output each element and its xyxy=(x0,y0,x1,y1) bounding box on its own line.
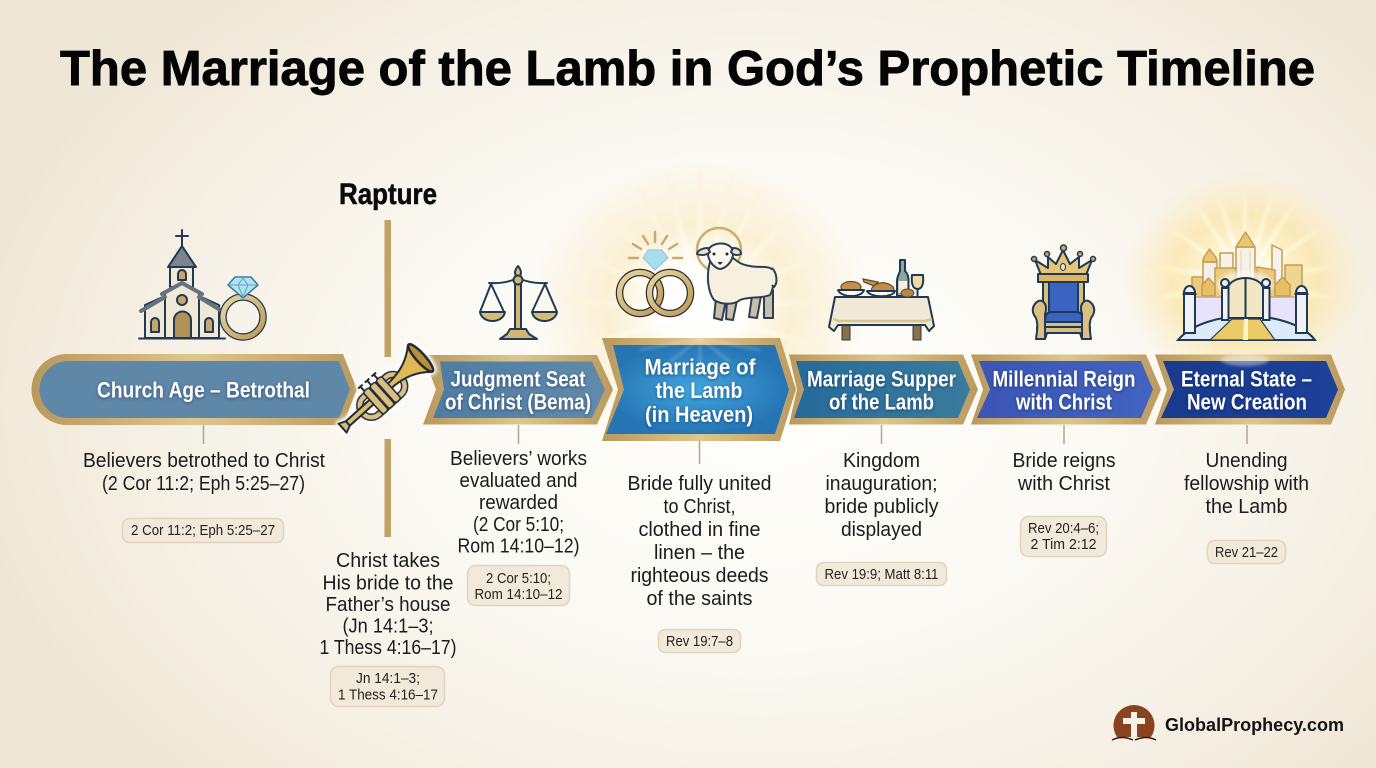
icon: new Jerusalem city and gate xyxy=(1178,232,1315,340)
reference pill: marriage of the Lamb xyxy=(658,630,740,652)
text: judgment seat: evaluated and xyxy=(460,470,578,492)
rapture vertical marker xyxy=(384,220,391,537)
text: church age xyxy=(83,450,325,495)
icon: crown and throne xyxy=(1032,245,1096,339)
reference pill: millennial reign: Rev 20:4–6; xyxy=(1028,521,1099,537)
reference pill: eternal state: Rev 21–22 xyxy=(1215,545,1278,561)
logo wordmark: GlobalProphecy.com xyxy=(1165,714,1344,735)
icon: banquet table xyxy=(829,260,934,340)
banner label xyxy=(992,366,1136,414)
text: marriage of the Lamb: to Christ, xyxy=(664,496,736,518)
banner label xyxy=(807,366,956,414)
banner label: Marriage of xyxy=(644,354,756,380)
heading: Rapture: Rapture xyxy=(339,178,437,211)
reference pill: church age: 2 Cor 11:2; Eph 5:25–27 xyxy=(131,523,275,539)
glow: eternal state xyxy=(1123,172,1367,388)
text: marriage supper: displayed xyxy=(841,519,922,541)
text: judgment seat: rewarded xyxy=(479,492,558,514)
logo: GlobalProphecy.com xyxy=(1112,705,1344,740)
banner label: Judgment Seat xyxy=(450,366,586,392)
banner label: with Christ xyxy=(1015,390,1113,414)
text: rapture: His bride to the xyxy=(322,572,454,594)
text: rapture: Christ takes xyxy=(336,550,440,572)
reference pill: rapture xyxy=(330,666,444,706)
text: marriage of the Lamb: clothed in fine xyxy=(638,519,760,541)
text: judgment seat xyxy=(450,448,587,558)
reference pill: marriage of the Lamb: Rev 19:7–8 xyxy=(666,634,733,650)
banner label: the Lamb xyxy=(656,378,742,403)
glow: marriage of the Lamb xyxy=(530,160,870,450)
icon: church and diamond ring xyxy=(139,230,263,338)
banner label: Marriage Supper xyxy=(807,366,956,392)
reference pill: rapture: 1 Thess 4:16–17 xyxy=(338,688,438,704)
text: church age: (2 Cor 11:2; Eph 5:25–27) xyxy=(102,473,305,495)
banner label xyxy=(445,366,591,414)
banner: marriage of the Lamb xyxy=(602,338,796,441)
text: rapture xyxy=(320,550,456,659)
icon: scales of judgment xyxy=(480,266,557,339)
text: eternal state: the Lamb xyxy=(1206,496,1288,518)
text: marriage supper: inauguration; xyxy=(826,473,938,495)
icon: wedding rings with diamond xyxy=(620,232,690,314)
banner label: of the Lamb xyxy=(829,390,934,414)
reference pill: millennial reign xyxy=(1020,516,1106,556)
reference pill: church age xyxy=(122,518,284,542)
text: eternal state: fellowship with xyxy=(1184,473,1309,495)
text: millennial reign: Bride reigns xyxy=(1012,450,1116,472)
text: marriage of the Lamb: linen – the xyxy=(654,542,745,564)
text: eternal state: Unending xyxy=(1206,450,1288,472)
reference pill: marriage supper xyxy=(816,562,946,586)
text: marriage of the Lamb xyxy=(628,473,772,610)
text: judgment seat: (2 Cor 5:10; xyxy=(473,514,564,536)
banner: church age xyxy=(31,354,357,425)
text: millennial reign: with Christ xyxy=(1017,473,1110,495)
icon: trumpet xyxy=(330,341,436,442)
text: judgment seat: Rom 14:10–12) xyxy=(458,536,580,558)
banner label xyxy=(1181,366,1312,414)
text: rapture: 1 Thess 4:16–17) xyxy=(320,637,456,659)
banner label xyxy=(644,354,756,427)
banner label: of Christ (Bema) xyxy=(445,390,591,414)
banner label: Millennial Reign xyxy=(992,366,1136,392)
banner label: Church Age – Betrothal xyxy=(97,378,310,402)
banner: marriage supper xyxy=(789,354,978,424)
banner label: (in Heaven) xyxy=(645,402,753,427)
banner: millennial reign xyxy=(971,354,1161,424)
text: marriage of the Lamb: of the saints xyxy=(646,588,752,610)
reference pill: rapture: Jn 14:1–3; xyxy=(356,671,420,687)
text: eternal state xyxy=(1184,450,1309,518)
text: church age: Believers betrothed to Christ xyxy=(83,450,325,472)
text: rapture: Father’s house xyxy=(326,594,450,616)
reference pill: millennial reign: 2 Tim 2:12 xyxy=(1030,537,1096,553)
reference pill: eternal state xyxy=(1208,540,1286,564)
text: marriage supper: Kingdom xyxy=(843,450,920,472)
reference pill: judgment seat xyxy=(468,566,570,606)
title: The Marriage of the Lamb in God’s Prophetic Timeline xyxy=(60,42,1315,96)
banner label: New Creation xyxy=(1187,390,1307,414)
text: rapture: (Jn 14:1–3; xyxy=(342,616,434,638)
reference pill: judgment seat: 2 Cor 5:10; xyxy=(486,571,551,587)
text: marriage supper xyxy=(824,450,938,541)
icon: lamb with halo xyxy=(697,228,776,320)
text: millennial reign xyxy=(1012,450,1116,495)
connector lines xyxy=(204,425,1247,464)
banner: judgment seat xyxy=(423,355,613,424)
banner label: Eternal State – xyxy=(1181,366,1312,392)
text: judgment seat: Believers’ works xyxy=(450,448,587,470)
reference pill: judgment seat: Rom 14:10–12 xyxy=(474,587,562,603)
text: marriage of the Lamb: righteous deeds xyxy=(630,565,768,587)
text: marriage of the Lamb: Bride fully united xyxy=(628,473,772,495)
reference pill: marriage supper: Rev 19:9; Matt 8:11 xyxy=(824,567,938,583)
text: marriage supper: bride publicly xyxy=(824,496,938,518)
banner: eternal state xyxy=(1155,354,1345,424)
